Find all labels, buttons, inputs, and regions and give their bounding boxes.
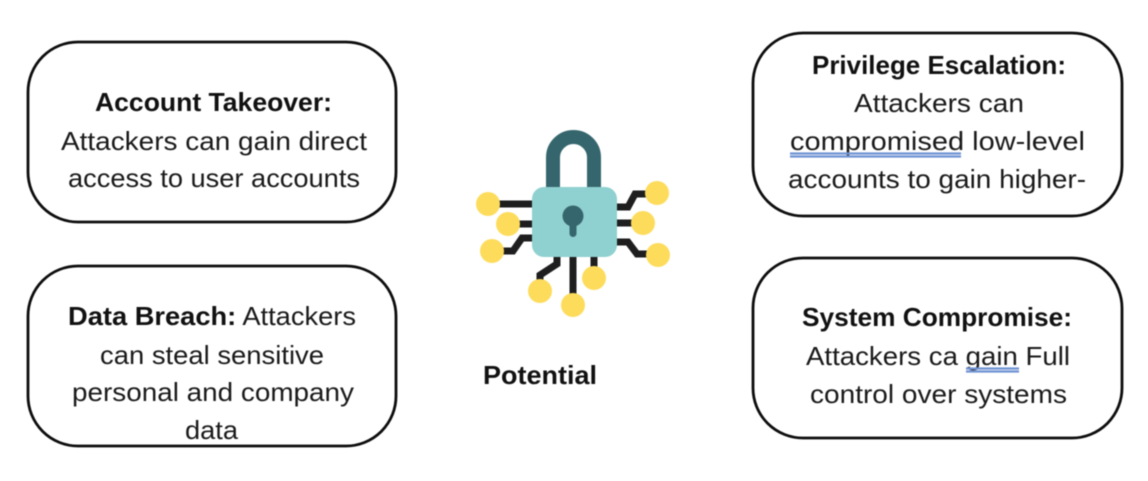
- icon: circuit padlock: [476, 137, 670, 317]
- label: potential: Potential: [483, 360, 597, 390]
- panel: account takeover: Attackers can gain direct: [61, 126, 368, 156]
- panel: data breach: data: [185, 415, 239, 445]
- panel: system compromise: [753, 258, 1122, 438]
- panel: account takeover: access to user accounts: [68, 163, 360, 193]
- panel: privilege escalation: accounts to gain higher-: [788, 164, 1086, 194]
- panel: account takeover: [28, 42, 396, 222]
- panel: privilege escalation: compromised low-level: [790, 126, 1085, 156]
- panel: data breach: [28, 266, 396, 446]
- panel: data breach: can steal sensitive: [100, 340, 324, 370]
- panel: privilege escalation: Privilege Escalation:: [812, 50, 1066, 80]
- panel: system compromise: Attackers ca gain Full: [806, 341, 1070, 371]
- panel: data breach: personal and company: [72, 377, 354, 407]
- panel: account takeover: Account Takeover:: [95, 87, 332, 117]
- panel: system compromise: System Compromise:: [802, 302, 1072, 332]
- panel: privilege escalation: [753, 33, 1122, 216]
- panel: privilege escalation: Attackers can: [854, 88, 1024, 118]
- panel: data breach: Data Breach: Attackers: [68, 301, 356, 331]
- panel: system compromise: control over systems: [810, 379, 1067, 409]
